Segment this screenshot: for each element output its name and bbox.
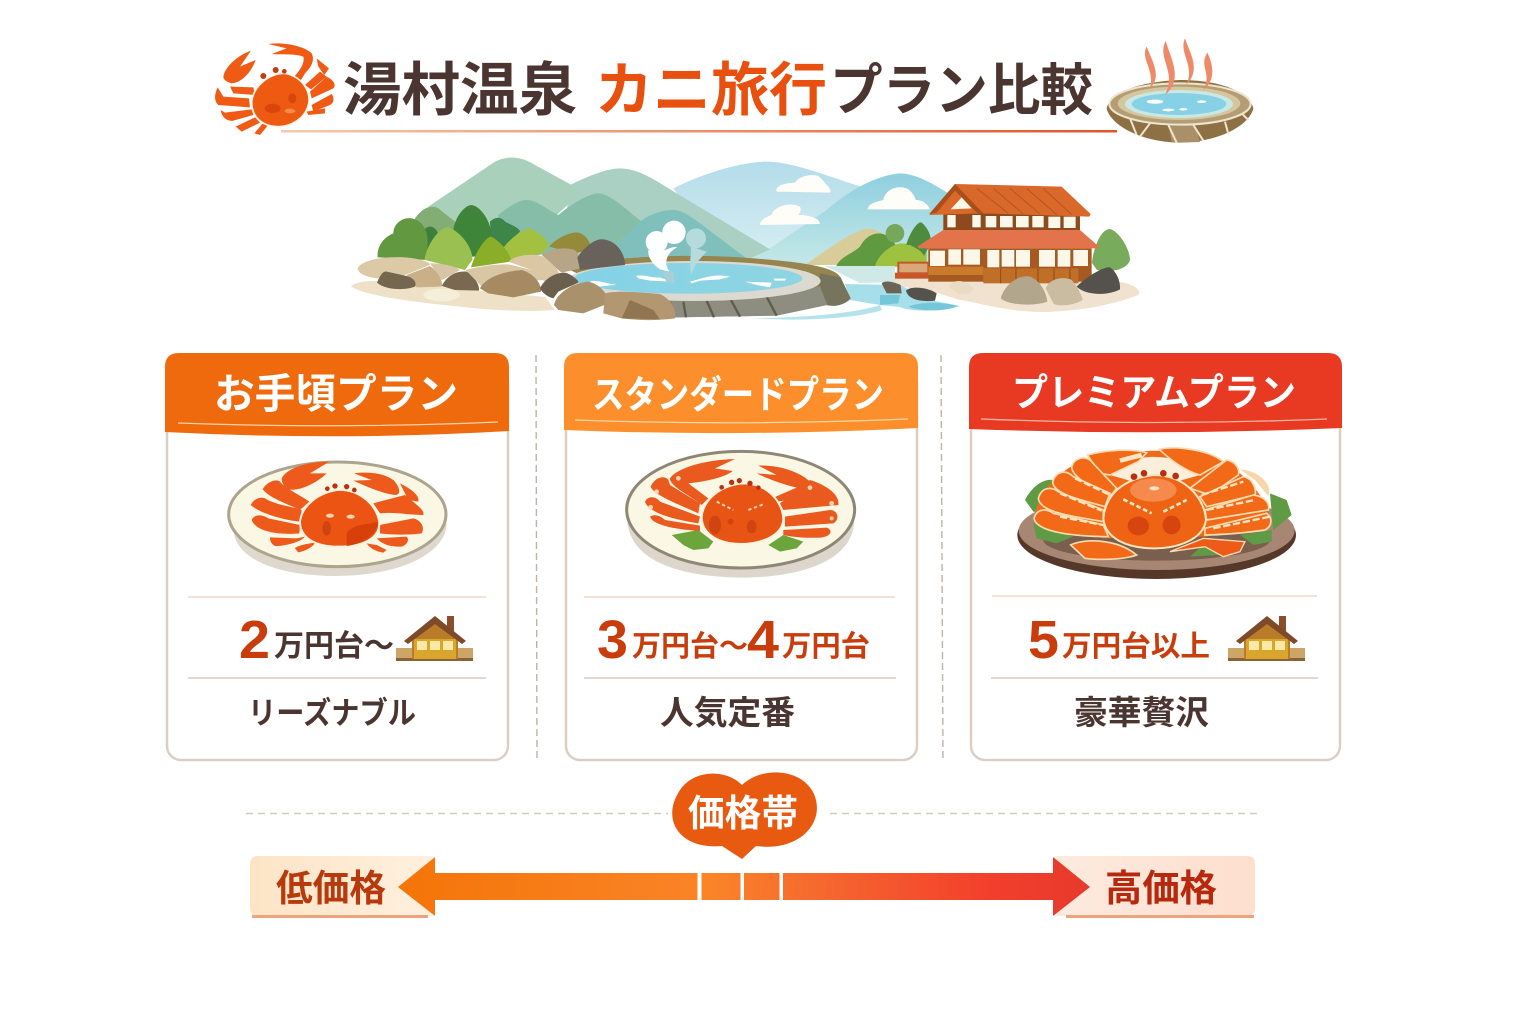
icon: hot spring tub (1107, 38, 1253, 143)
panel: お手頃プラン (165, 353, 509, 760)
label: 低価格 (250, 856, 432, 918)
price (1028, 610, 1210, 670)
description: 人気定番 (660, 694, 795, 731)
price: 万円台〜 (632, 630, 748, 663)
price: 万円台以上 (1062, 630, 1210, 663)
illustration: onsen landscape (351, 158, 1139, 320)
clouds (760, 175, 930, 225)
rocks left (358, 239, 675, 320)
icon: house (396, 616, 473, 661)
heading: 湯村温泉: 湯村温泉 (343, 58, 577, 123)
title underline (281, 130, 1117, 132)
price: 5 (1028, 610, 1059, 670)
water stream (755, 266, 960, 320)
rule (188, 677, 486, 679)
steam plume (646, 221, 707, 275)
price (597, 610, 870, 670)
price: 2 (239, 610, 270, 670)
label: 低価格: 低価格 (276, 868, 386, 909)
header band (969, 353, 1342, 432)
divider: dashed vertical 2 (941, 355, 943, 762)
bubble: 価格帯: 価格帯 (688, 793, 798, 834)
header text: スタンダードプラン (592, 375, 884, 417)
ground left (351, 281, 555, 311)
divider: dashed vertical 1 (536, 355, 537, 762)
heading: カニ旅行: カニ旅行 (595, 58, 827, 123)
bubble: 価格帯 (672, 772, 817, 859)
label: 高価格: 高価格 (1105, 868, 1217, 909)
panel: プレミアムプラン (969, 353, 1342, 760)
pool (566, 221, 851, 317)
mountains (428, 158, 960, 265)
trees right (805, 222, 931, 267)
price (239, 610, 394, 670)
trees left (378, 205, 590, 270)
price band legend (246, 772, 1260, 859)
icon: house (1228, 616, 1305, 661)
title (215, 38, 1253, 143)
heading: プラン比較: プラン比較 (830, 59, 1093, 122)
price: 万円台〜 (274, 630, 394, 663)
header rule (575, 419, 908, 423)
price: 4 (747, 610, 779, 670)
header band (165, 353, 509, 436)
ground right (883, 275, 1139, 312)
header text: プレミアムプラン (1012, 373, 1296, 415)
icon: crab (215, 43, 335, 135)
ryokan and right rocks (880, 184, 1120, 310)
description: 豪華贅沢 (1074, 694, 1209, 731)
header band (564, 353, 918, 433)
price: 万円台 (782, 630, 870, 663)
arrow: price scale (398, 857, 1090, 916)
right tree (1092, 229, 1130, 271)
rule (991, 677, 1318, 679)
crab plate (229, 462, 447, 576)
header rule (981, 419, 1327, 422)
rule (188, 596, 486, 598)
label: 高価格 (1056, 856, 1255, 918)
rule (584, 596, 895, 598)
price: 3 (597, 610, 628, 670)
header rule (178, 422, 498, 426)
panel: スタンダードプラン (564, 353, 918, 760)
crab platter (1017, 448, 1296, 579)
description: リーズナブル (248, 696, 416, 731)
crab plate (627, 451, 855, 578)
header text: お手頃プラン (214, 371, 458, 417)
rule (992, 595, 1317, 597)
rule (584, 677, 896, 679)
